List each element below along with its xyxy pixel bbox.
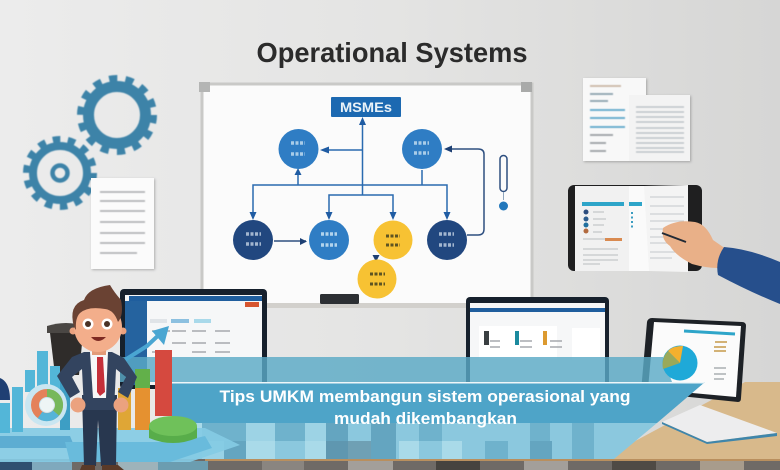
flowchart node: top left bbox=[278, 129, 318, 169]
flowchart node: yellow lower bbox=[358, 260, 396, 298]
neck bbox=[92, 345, 106, 355]
legs bbox=[82, 395, 117, 466]
back paper bbox=[583, 78, 646, 161]
document: right papers bbox=[583, 78, 690, 161]
title: Operational Systems bbox=[256, 37, 528, 68]
sleeve bbox=[717, 247, 780, 304]
smile bbox=[91, 337, 106, 341]
tablet body bbox=[568, 185, 702, 271]
notebook on desk bbox=[662, 405, 777, 444]
coffee cup bbox=[47, 323, 85, 375]
shoes bbox=[80, 465, 124, 470]
laptop: middle bbox=[466, 297, 609, 389]
MSMEs box: MSMEs bbox=[340, 100, 392, 115]
pie chart on tablet bbox=[662, 346, 698, 380]
icon: small gear bbox=[26, 140, 94, 206]
flowchart node: yellow middle bbox=[374, 220, 412, 260]
status marker bbox=[499, 156, 508, 210]
open notebook bbox=[575, 185, 688, 272]
front paper bbox=[629, 95, 690, 161]
flowchart node: blue middle bbox=[309, 220, 349, 260]
board tray bbox=[200, 303, 535, 308]
blue platform bbox=[0, 428, 240, 462]
face bbox=[74, 302, 122, 352]
jacket and arms bbox=[57, 352, 137, 410]
banner heading: Tips UMKM membangun sistem operasional yang bbox=[220, 387, 630, 406]
translucent banner band bbox=[120, 357, 672, 382]
main banner band bbox=[172, 382, 705, 428]
desk bottom strip bbox=[0, 459, 780, 470]
tablet: right bbox=[641, 318, 746, 402]
tie bbox=[97, 357, 105, 396]
document: left paper bbox=[91, 178, 154, 269]
eyes bbox=[82, 318, 94, 330]
arrow bbox=[120, 326, 169, 363]
icon: gears bbox=[26, 79, 153, 206]
eraser bbox=[320, 294, 359, 304]
flowchart connectors bbox=[253, 120, 484, 241]
shirt bbox=[90, 352, 108, 398]
hands bbox=[70, 398, 86, 412]
chart: donut bbox=[25, 384, 67, 426]
main banner band: mudah dikembangkan bbox=[334, 409, 517, 428]
flowchart node: top right bbox=[402, 129, 442, 169]
MSMEs box bbox=[331, 97, 401, 117]
flowchart arrowheads bbox=[250, 117, 452, 262]
laptop: left bbox=[120, 289, 267, 389]
pen bbox=[662, 233, 686, 242]
tablet with notebook and hand bbox=[568, 185, 780, 304]
flowchart node: navy right bbox=[427, 220, 467, 260]
hand bbox=[663, 221, 726, 268]
sleeve at far left bbox=[0, 378, 10, 400]
hair bbox=[72, 285, 122, 330]
pixelated lower band bbox=[172, 423, 657, 459]
icon: large gear bbox=[81, 79, 153, 151]
desk bbox=[600, 382, 780, 460]
ears bbox=[70, 328, 76, 334]
character: businessman bbox=[57, 285, 137, 470]
whiteboard bbox=[199, 82, 535, 308]
flowchart node: navy left bbox=[233, 220, 273, 260]
chart: blue bars bbox=[0, 351, 70, 433]
chart: stacked bars bbox=[118, 350, 197, 443]
